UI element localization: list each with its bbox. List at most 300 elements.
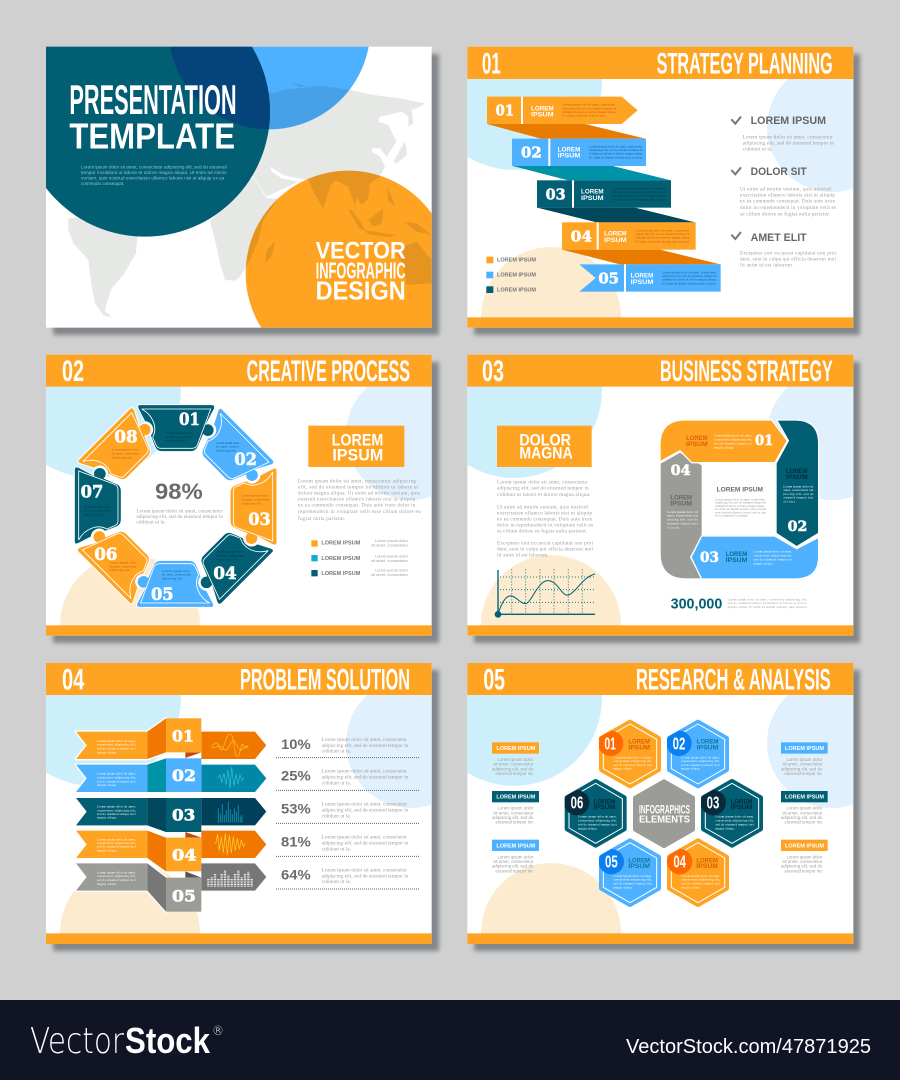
- legend notes: sit amet, consectetur: [371, 543, 409, 548]
- footer bar: [467, 933, 853, 944]
- percentages: [281, 736, 311, 882]
- vectorstock logo: Stock: [125, 1020, 211, 1061]
- puzzle inner outlines: [79, 409, 273, 603]
- puzzle captions: sit amet, consectetur: [112, 452, 140, 457]
- vectorstock logo: ®: [212, 1024, 224, 1038]
- body paragraphs: Excepteur sint occaecat cupidatat non proi: [497, 541, 594, 547]
- puzzle captions: Lorem ipsum dolor: [166, 431, 193, 435]
- checklist item: dolor sit: DOLOR SIT: [751, 166, 807, 178]
- percentage descriptions: adipiscing elit, sed do eiusmod tempor in: [322, 743, 409, 749]
- stat description: sed do eiusmod tempor incididunt ut labore et dolore: [728, 601, 807, 605]
- hexagon 05: 05: [605, 852, 618, 872]
- body paragraphs: cididunt ut labore et dolore magna aliqua.: [497, 492, 590, 498]
- right labelled notes: sit amet, consectetur: [782, 810, 823, 815]
- loop labels: eiusmod tempor inci: [667, 521, 698, 525]
- row 03 ribbon: magna aliqua.: [97, 816, 117, 820]
- step 05: Lorem ipsum dolor sit amet, consectetur: [662, 270, 717, 275]
- image id: VectorStock.com/47871925: [626, 1036, 871, 1058]
- row 01 ribbon: sed do eiusmod tempor inci: [97, 747, 136, 751]
- percentages: 53%: [281, 801, 311, 817]
- header: 04: [62, 663, 85, 696]
- hexagon 03: sed do eiusmod tempor inci: [715, 822, 754, 826]
- hexagon 01: Lorem ipsum dolor sit amet,: [613, 755, 652, 760]
- row 04 ribbon: sed do eiusmod tempor inci: [97, 845, 136, 849]
- hexagon 04: sed do eiusmod tempor inci: [681, 882, 720, 886]
- loop labels: IPSUM: [686, 441, 708, 448]
- loop labels: LOREM: [726, 551, 748, 558]
- loop labels: magna aliqua.: [753, 561, 774, 565]
- loop labels: aliqua.: [783, 500, 797, 504]
- hexagon 03: IPSUM: [731, 804, 753, 811]
- hexagon 06: magna aliqua.: [578, 826, 598, 830]
- header: [46, 663, 432, 696]
- cover title: [69, 77, 237, 156]
- background circles: [46, 386, 432, 626]
- hexagon 02: LOREM: [697, 739, 719, 746]
- step 01: IPSUM: [531, 112, 554, 119]
- left labelled notes: adipiscing elit, sed do: [492, 815, 534, 820]
- left labelled notes: Lorem ipsum dolor: [497, 757, 534, 762]
- loop center text: LOREM IPSUM: [717, 486, 763, 493]
- step 01: Lorem ipsum dolor sit amet, consectetur: [562, 103, 616, 108]
- puzzle numbers: 06: [94, 545, 117, 564]
- body paragraphs: lit anim id est laborum.: [497, 553, 549, 559]
- loop labels: sed do eiusmod tempor in: [714, 441, 752, 445]
- legend: LOREM IPSUM: [321, 556, 361, 562]
- right labelled notes: LOREM IPSUM: [785, 746, 824, 752]
- octagon puzzle diagram: [74, 405, 277, 607]
- background circles: [46, 695, 432, 934]
- center percentage 98%: 98%: [155, 479, 203, 504]
- row 01 ribbon: [76, 718, 266, 759]
- center description: [136, 508, 223, 526]
- body paragraph: reprehenderit in voluptate velit esse cillum dolore eu: [298, 509, 421, 515]
- percentage descriptions: adipiscing elit, sed do eiusmod tempor in: [322, 841, 409, 847]
- puzzle captions: adipiscing elit: [241, 501, 261, 505]
- hexagon 04: magna aliqua.: [681, 886, 701, 890]
- row 05 ribbon: sed do eiusmod tempor inci: [97, 878, 136, 882]
- hexagon 01: sed do eiusmod tempor inci: [613, 763, 652, 767]
- puzzle numbers: 04: [213, 564, 237, 583]
- loop labels: Lorem ipsum dolor sit: [783, 484, 813, 488]
- hexagon 04: 04: [673, 852, 686, 872]
- puzzle numbers: 05: [151, 585, 174, 604]
- loop labels: [667, 433, 814, 566]
- row 02 ribbon: 02: [172, 766, 196, 785]
- center description: Lorem ipsum dolor sit amet, consectetur: [136, 508, 223, 514]
- step 02: cididunt ut labore et dolore magna aliqua.: [589, 152, 643, 156]
- hexagon 06: [564, 781, 624, 845]
- panel: cover presentation template: [46, 46, 432, 328]
- step 04: [562, 222, 696, 250]
- cover description: [81, 165, 227, 186]
- loop labels: eiusmod tempor inci: [783, 496, 813, 500]
- background: [467, 355, 853, 636]
- loop labels: piscing elit, sed do: [667, 518, 698, 523]
- loop center text: Lorem ipsum dolor sit amet, consectetur: [715, 498, 766, 503]
- cover description: tempor incididunt ut labore et dolore magna aliqua. Ut enim ad minim: [81, 170, 227, 175]
- legend: LOREM IPSUM: [497, 288, 536, 294]
- header: CREATIVE PROCESS: [247, 355, 410, 388]
- panel: 04 problem solution: [46, 663, 432, 944]
- left labelled notes: [492, 742, 539, 873]
- lorem ipsum callout box: IPSUM: [332, 445, 383, 464]
- puzzle captions: [84, 431, 270, 581]
- lorem ipsum callout box: [308, 426, 404, 467]
- left labelled notes: LOREM IPSUM: [496, 795, 536, 801]
- puzzle captions: sit amet, consectetur: [84, 509, 112, 514]
- loop labels: magna aliqua.: [714, 445, 734, 449]
- vector infographic design heading: INFOGRAPHIC: [316, 257, 406, 283]
- right labelled notes: Lorem ipsum dolor: [786, 854, 823, 859]
- step 05: LOREM: [631, 273, 654, 280]
- legend notes: Lorem ipsum dolor: [375, 538, 409, 543]
- checklist item: dolor sit: Ut enim ad minim veniam, quis nostrud: [740, 187, 831, 193]
- hexagon 05: magna aliqua.: [613, 886, 633, 890]
- loop labels: LOREM: [786, 468, 808, 475]
- loop labels: amet, consectetur adi: [783, 488, 813, 493]
- step 01: 01: [496, 102, 514, 120]
- legend notes: Lorem ipsum dolor: [375, 567, 409, 572]
- loop segment 01 orange: [660, 420, 787, 463]
- body paragraph: fugiat nulla pariatur.: [298, 515, 345, 522]
- footer bar: [46, 933, 432, 944]
- dolor magna callout box: [497, 426, 592, 467]
- body paragraphs: adipiscing elit, sed do eiusmod tempor in: [497, 486, 589, 492]
- loop labels: sed do eiusmod tempor in: [753, 558, 792, 562]
- loop labels: 02: [788, 519, 807, 535]
- step 05: [579, 264, 721, 292]
- legend: LOREM IPSUM: [497, 258, 536, 264]
- body paragraphs: dolor in reprehenderit in voluptate velit es: [497, 522, 593, 528]
- hexagon 02: IPSUM: [697, 744, 719, 751]
- panel shadows: [53, 54, 860, 951]
- loop labels: consectetur adipiscing elit,: [753, 554, 792, 559]
- background: [467, 663, 853, 944]
- checklist item: lorem ipsum: LOREM IPSUM: [751, 115, 826, 127]
- puzzle captions: adipiscing elit: [110, 568, 130, 572]
- step 03: [537, 180, 671, 208]
- hexagon 03: LOREM: [731, 798, 753, 805]
- left labelled notes: Lorem ipsum dolor: [497, 854, 534, 859]
- checklist item: dolor sit: ex ea commodo consequat. Duis aute irure: [740, 199, 836, 205]
- orange circle: [246, 170, 432, 328]
- puzzle captions: sit amet, consectetur: [166, 435, 193, 440]
- step 03: cididunt ut labore et dolore magna aliqua.: [612, 194, 667, 198]
- header: 02: [62, 355, 84, 388]
- hexagon 03: consectetur adipiscing elit,: [715, 818, 754, 823]
- step 01: adipiscing elit, sed do eiusmod tempor in: [562, 106, 616, 111]
- step 05: Ut enim ad minim veniam quis nostrud: [662, 281, 716, 285]
- header: 05: [483, 663, 505, 696]
- background: [46, 355, 432, 636]
- legend: [311, 540, 361, 577]
- step 03: Lorem ipsum dolor sit amet, consectetur: [612, 186, 667, 191]
- left labelled notes: sit amet, consectetur: [493, 810, 534, 815]
- loop center text: adipiscing elit, sed do eiusmod tempor in: [715, 501, 766, 506]
- puzzle captions: Lorem ipsum dolor: [241, 494, 270, 498]
- row 03 ribbon: sed do eiusmod tempor inci: [97, 812, 136, 816]
- loop segment 02 teal: [776, 420, 819, 547]
- percentage descriptions: Lorem ipsum dolor sit amet, consectetur: [322, 867, 407, 873]
- vectorstock logo: [30, 1020, 224, 1062]
- teal circle: [46, 46, 270, 237]
- lorem ipsum callout box: LOREM: [332, 431, 383, 450]
- process loop: [660, 420, 819, 579]
- percentage descriptions: [322, 737, 409, 885]
- left labelled notes: sit amet, consectetur: [493, 859, 534, 864]
- circle overlap: [170, 46, 270, 130]
- left labelled notes: eiusmod tempor inc: [496, 868, 534, 873]
- body paragraphs: se cillum dolore eu fugiat nulla pariatur.: [497, 528, 587, 535]
- loop center text: ex ea commodo consequat.: [715, 514, 749, 518]
- checklist item: lorem ipsum: adipiscing elit, sed do eiusmod tempor in: [743, 141, 834, 147]
- puzzle captions: Lorem ipsum dolor: [216, 441, 240, 445]
- hexagon center: [635, 782, 693, 846]
- header: [467, 663, 853, 696]
- row 04 ribbon: 04: [172, 846, 197, 865]
- checklist item: amet elit: [731, 232, 837, 269]
- left labelled notes: sit amet, consectetur: [493, 762, 534, 767]
- hexagon center: ELEMENTS: [639, 815, 690, 826]
- hexagon 05: sed do eiusmod tempor inci: [613, 882, 652, 886]
- puzzle shapes: [74, 405, 277, 607]
- loop center text: Ut enim ad minim veniam, quis nostrud: [715, 507, 766, 512]
- cover description: commodo consequat.: [81, 181, 124, 186]
- staircase connectors: [487, 124, 720, 264]
- percentage descriptions: cididunt ut la.: [322, 749, 351, 755]
- row 02 ribbon: [76, 758, 266, 792]
- row 01 ribbon: magna aliqua.: [97, 751, 117, 755]
- puzzle captions: sit amet, consectetur: [162, 573, 192, 578]
- row 04 ribbon: consectetur adipiscing elit,: [97, 841, 136, 846]
- hexagon 06: sed do eiusmod tempor inci: [578, 822, 617, 826]
- hexagon 03: Lorem ipsum dolor sit amet,: [715, 815, 754, 820]
- puzzle captions: sit amet, consect: [216, 445, 239, 450]
- loop labels: IPSUM: [670, 501, 692, 508]
- body paragraphs: exercitation ullamco laboris nisi ut aliquip: [497, 510, 592, 516]
- puzzle captions: Lorem ipsum dolor: [217, 550, 244, 554]
- puzzle numbers: 08: [114, 427, 138, 446]
- cover artwork with world map and circles: [46, 46, 432, 328]
- right labelled notes: adipiscing elit, sed do: [781, 766, 823, 771]
- left labelled notes: adipiscing elit, sed do: [492, 864, 534, 869]
- puzzle numbers: [81, 410, 271, 604]
- checklist item: amet elit: lit anim id est laborum.: [740, 263, 793, 269]
- percentages: 64%: [281, 866, 311, 882]
- percentages: 25%: [281, 768, 311, 784]
- percentage descriptions: Lorem ipsum dolor sit amet, consectetur: [322, 737, 407, 743]
- stat 300,000: 300,000: [671, 596, 722, 612]
- dolor magna callout box: MAGNA: [519, 444, 573, 463]
- step 03: adipiscing elit, sed do eiusmod tempor in: [612, 190, 667, 195]
- row 04 ribbon: magna aliqua.: [97, 848, 117, 852]
- loop labels: Lorem ipsum dolor sit: [667, 510, 698, 514]
- body paragraph: dolore magna aliqua. Ut enim ad minim veniam, quis: [298, 490, 420, 496]
- hexagon 05: LOREM: [628, 857, 650, 864]
- body paragraph: ex ea commodo consequat. Duis aute irure dolor in: [298, 503, 416, 509]
- row 04 ribbon: Lorem ipsum dolor sit amet,: [97, 837, 136, 842]
- row 05 ribbon: magna aliqua.: [97, 882, 117, 886]
- loop labels: LOREM: [686, 435, 708, 442]
- percentage descriptions: cididunt ut la.: [322, 879, 351, 885]
- right labelled notes: sit amet, consectetur: [782, 762, 823, 767]
- left labelled notes: adipiscing elit, sed do: [492, 766, 534, 771]
- body paragraph: elit, sed do eiusmod tempor incididunt ut labore et: [298, 484, 419, 490]
- percentage descriptions: adipiscing elit, sed do eiusmod tempor in: [322, 808, 409, 814]
- puzzle captions: adipiscing elit: [84, 512, 104, 516]
- hexagon 03: 03: [707, 793, 720, 813]
- loop center text: cididunt ut labore et dolore magna aliqua.: [715, 504, 765, 508]
- puzzle captions: Lorem ipsum dolor: [84, 505, 112, 509]
- vector infographic design heading: [316, 237, 406, 305]
- vector infographic design heading: DESIGN: [316, 277, 406, 305]
- loop labels: LOREM: [670, 495, 692, 502]
- cover description: veniam, quis nostrud exercitation ullamco laboris nisi ut aliquip ex ea: [81, 175, 225, 180]
- loop labels: piscing elit, sed do: [783, 492, 814, 497]
- blue circle: [252, 46, 369, 130]
- puzzle captions: sit amet, consectetur: [110, 564, 137, 569]
- puzzle captions: adipiscing elit: [166, 439, 186, 443]
- cover title: TEMPLATE: [69, 115, 235, 156]
- step 04: IPSUM: [604, 237, 627, 244]
- step 01: [487, 97, 638, 124]
- percentage descriptions: cididunt ut la.: [322, 813, 351, 819]
- row 05 ribbon: Lorem ipsum dolor sit amet,: [97, 870, 136, 875]
- hexagon 01: consectetur adipiscing elit,: [613, 759, 652, 764]
- percentages: 10%: [281, 736, 311, 752]
- hexagon 05: IPSUM: [628, 863, 650, 870]
- loop center text: exercitation ullamco laboris nisi ut aliq: [715, 510, 766, 514]
- center description: adipiscing elit, sed do eiusmod tempor in: [136, 514, 223, 520]
- hexagon 02: magna aliqua.: [681, 767, 701, 771]
- stat description: magna aliqua. Ut enim ad minim veniam, quis nostrud: [728, 605, 807, 610]
- loop center text: [715, 486, 766, 518]
- body paragraph: Lorem ipsum dolor sit amet, consectetur adipiscing: [298, 478, 416, 484]
- vectorstock logo: Vector: [30, 1021, 124, 1062]
- hexagon 01: 01: [604, 733, 616, 753]
- loop segment 04 gray: [660, 452, 702, 579]
- legend notes: sit amet, consectetur: [371, 572, 409, 577]
- header: 03: [482, 355, 504, 388]
- puzzle captions: adipiscing elit: [112, 456, 132, 460]
- right labelled notes: sit amet, consectetur: [782, 859, 823, 864]
- cover title: PRESENTATION: [69, 77, 237, 123]
- row 05 ribbon: 05: [172, 887, 196, 906]
- header: PROBLEM SOLUTION: [240, 663, 410, 696]
- right labelled notes: eiusmod tempor inc: [785, 868, 823, 873]
- step 04: adipiscing elit, sed do eiusmod tempor in: [635, 232, 690, 237]
- loop labels: consectetur adipiscing elit,: [714, 437, 752, 442]
- right labelled notes: eiusmod tempor inc: [785, 820, 823, 825]
- stat description: Lorem ipsum dolor sit amet, consectetur adipiscing elit,: [728, 597, 807, 602]
- checklist item: lorem ipsum: Lorem ipsum dolor sit amet, consectetur: [743, 135, 833, 141]
- row 02 ribbon: Lorem ipsum dolor sit amet,: [97, 772, 136, 777]
- row 05 ribbon: consectetur adipiscing elit,: [97, 874, 136, 879]
- hexagon 03: magna aliqua.: [715, 826, 735, 830]
- puzzle captions: adipiscing elit: [162, 577, 182, 581]
- percentage descriptions: cididunt ut la.: [322, 780, 351, 786]
- checklist item: dolor sit: exercitation ullamco laboris nisi ut aliquip: [740, 193, 835, 199]
- hexagon 06: 06: [571, 793, 584, 813]
- background circles: [467, 695, 854, 934]
- checklist item: amet elit: AMET ELIT: [751, 232, 807, 244]
- right labelled notes: Lorem ipsum dolor: [786, 806, 823, 811]
- checklist item: dolor sit: [731, 166, 836, 217]
- legend: LOREM IPSUM: [497, 273, 536, 279]
- legend notes: Lorem ipsum dolor: [375, 553, 409, 558]
- percentage descriptions: Lorem ipsum dolor sit amet, consectetur: [322, 802, 407, 808]
- loop labels: amet, consectetur adi: [667, 514, 698, 519]
- hexagon 06: LOREM: [594, 798, 616, 805]
- hexagon 04: LOREM: [696, 857, 718, 864]
- legend: [486, 257, 536, 294]
- step 01: cididunt ut labore et dolore magna aliqua.: [562, 110, 616, 114]
- right labelled notes: [781, 742, 828, 873]
- hexagon 06: Lorem ipsum dolor sit amet,: [578, 815, 617, 820]
- footer bar: [46, 625, 432, 636]
- loop segment 03 blue: [691, 536, 819, 579]
- body paragraphs: dent, sunt in culpa qui officia deserunt mol: [497, 546, 594, 553]
- row 05 ribbon: [76, 863, 266, 912]
- row 02 ribbon: magna aliqua.: [97, 783, 117, 787]
- step 02: IPSUM: [558, 153, 581, 160]
- left labelled notes: Lorem ipsum dolor: [497, 806, 534, 811]
- panel: 01 strategy planning: [467, 46, 854, 328]
- hexagon 05: consectetur adipiscing elit,: [613, 878, 652, 883]
- right labelled notes: Lorem ipsum dolor: [786, 757, 823, 762]
- hexagon 05: [599, 841, 659, 905]
- step 03: IPSUM: [581, 195, 604, 202]
- puzzle numbers: 02: [234, 450, 257, 469]
- right labelled notes: adipiscing elit, sed do: [781, 864, 823, 869]
- step 02: Ut enim ad minim veniam quis nostrud: [589, 155, 643, 159]
- left labelled notes: eiusmod tempor inc: [496, 771, 534, 776]
- step 04: cididunt ut labore et dolore magna aliqua.: [635, 236, 690, 240]
- step 02: 02: [521, 143, 542, 161]
- loop labels: 01: [755, 433, 773, 449]
- loop labels: 03: [700, 550, 719, 566]
- vector infographic design heading: VECTOR: [316, 237, 406, 264]
- step 02: [512, 139, 646, 166]
- panel: 03 business strategy: [467, 354, 854, 636]
- row 01 ribbon: consectetur adipiscing elit,: [97, 743, 136, 748]
- footer bar: [467, 625, 853, 636]
- row 02 ribbon: consectetur adipiscing elit,: [97, 776, 136, 781]
- legend notes: sit amet, consectetur: [371, 558, 409, 563]
- right labelled notes: LOREM IPSUM: [785, 795, 824, 801]
- hexagon 02: Lorem ipsum dolor sit amet,: [681, 755, 720, 760]
- row 04 ribbon: [76, 831, 266, 871]
- step 03: Ut enim ad minim veniam quis nostrud: [612, 197, 666, 201]
- step 02: LOREM: [558, 146, 581, 153]
- body paragraph: [298, 478, 421, 522]
- background: [467, 47, 853, 328]
- legend: LOREM IPSUM: [321, 571, 361, 577]
- hexagon 02: [666, 722, 727, 786]
- left labelled notes: eiusmod tempor inc: [496, 820, 534, 825]
- hexagon 02: 02: [673, 733, 685, 753]
- row 01 ribbon: Lorem ipsum dolor sit amet,: [97, 739, 136, 744]
- hexagon 01: LOREM: [628, 739, 650, 746]
- loop labels: Lorem ipsum dolor sit amet,: [753, 550, 792, 555]
- background: [46, 663, 432, 944]
- percentage descriptions: Lorem ipsum dolor sit amet, consectetur: [322, 834, 407, 840]
- body paragraphs: ex ea commodo consequat. Duis aute irure: [497, 516, 593, 522]
- step 01: Ut enim ad minim veniam quis: [562, 114, 606, 118]
- legend: LOREM IPSUM: [321, 541, 361, 547]
- puzzle captions: sit amet, consectetur: [241, 497, 270, 502]
